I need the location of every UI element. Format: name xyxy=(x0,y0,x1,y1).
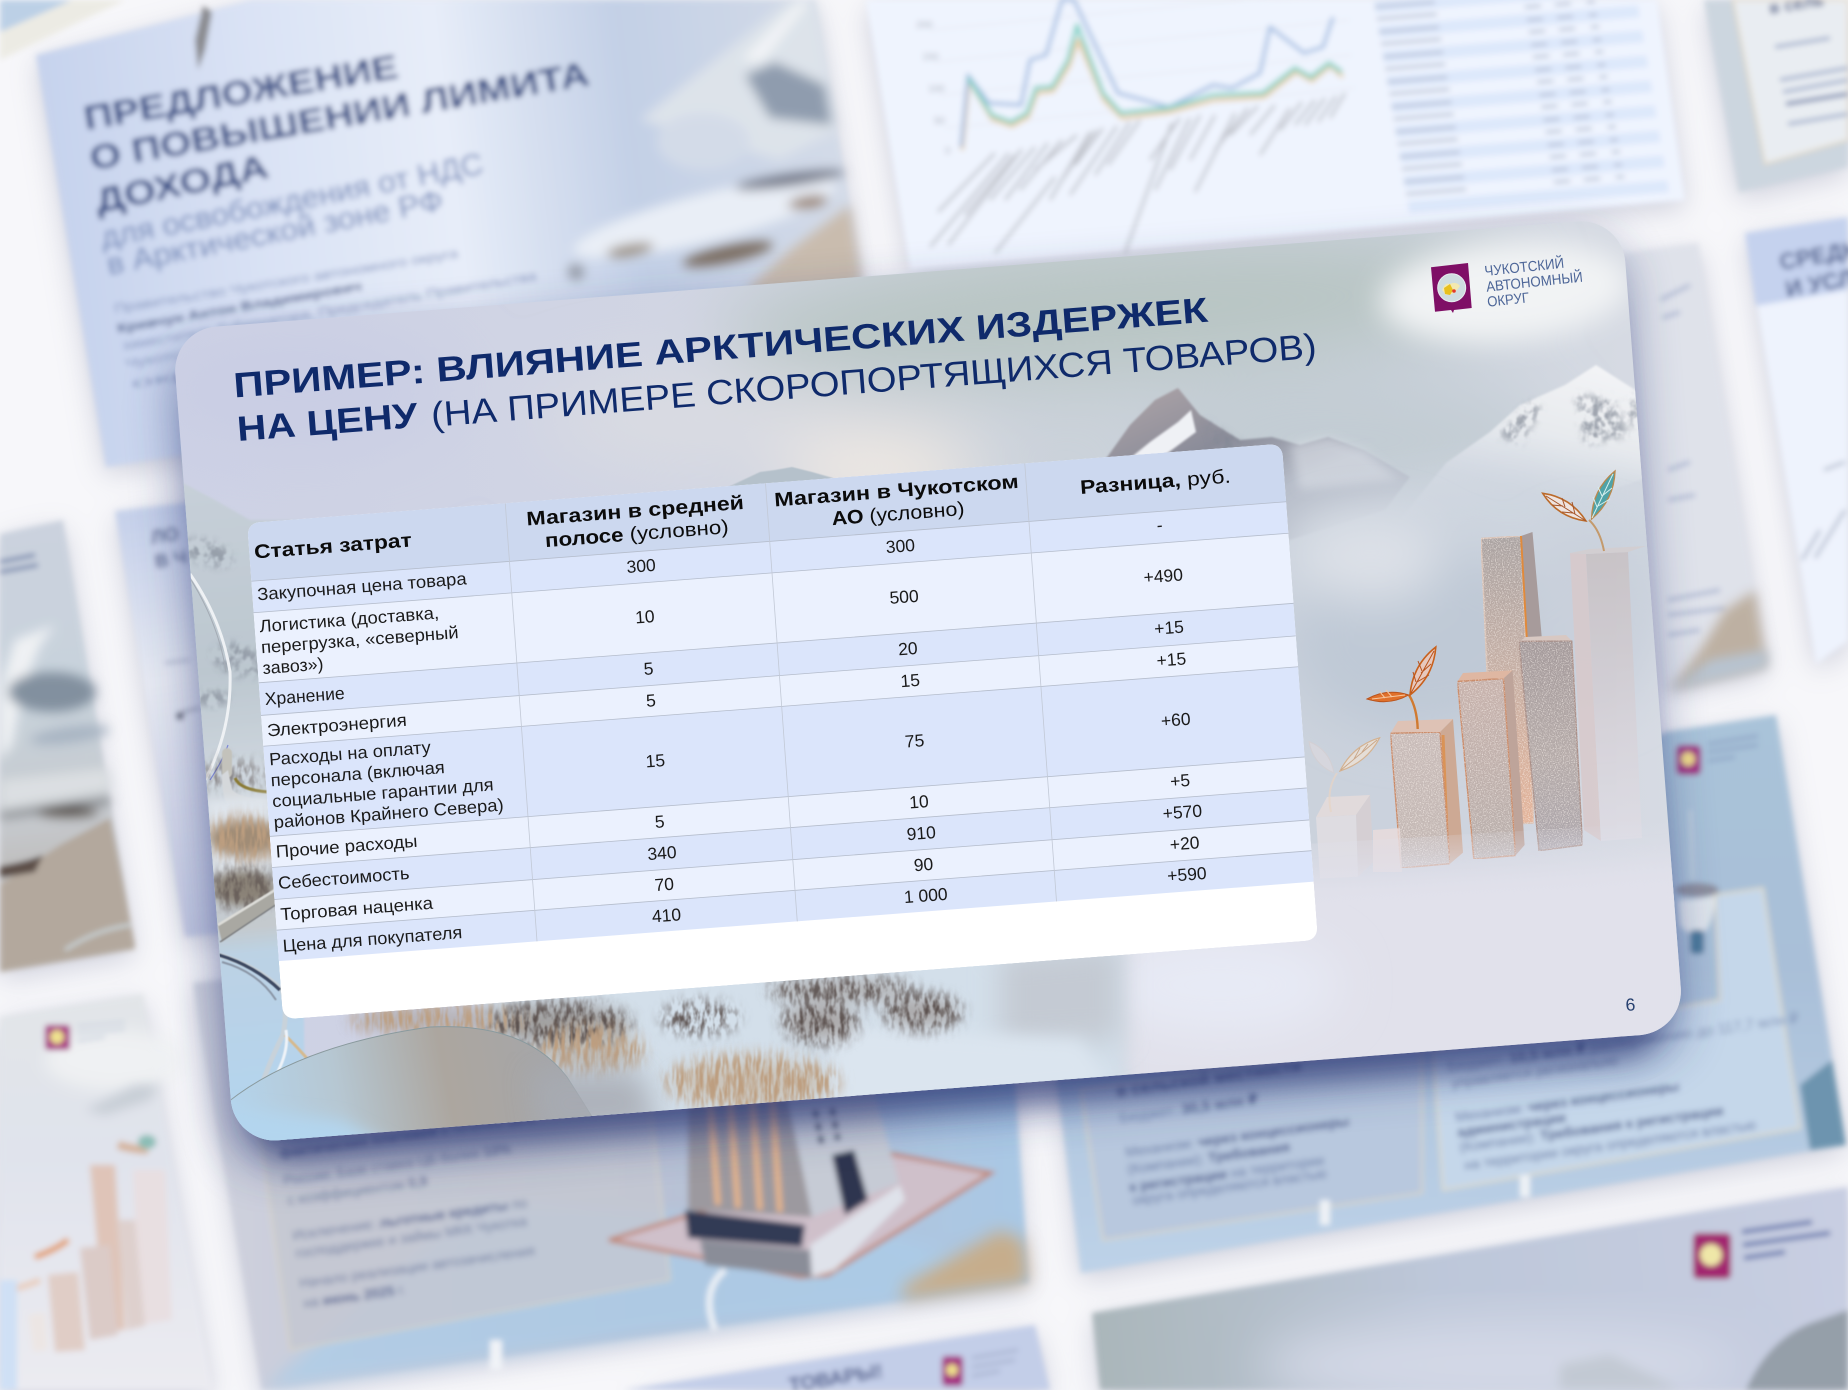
blurred card text: на июнь 2025 г. xyxy=(302,1281,407,1311)
leaves: orange sprout xyxy=(1367,647,1436,729)
table column: mid-latitude store values xyxy=(626,555,682,926)
table column: mid-latitude store values: 340 xyxy=(647,842,678,864)
building xyxy=(685,1085,905,1277)
table row labels: социальные гарантии для xyxy=(271,774,494,811)
table column: mid-latitude store values: 70 xyxy=(654,874,675,895)
blurred proposal authors: Правительство Чукотского автономного округа xyxy=(113,245,460,316)
table column: difference values: +60 xyxy=(1160,709,1191,731)
table row labels: районов Крайнего Севера) xyxy=(273,795,504,832)
table column: mid-latitude store values: 15 xyxy=(645,750,666,772)
light blue lower corner xyxy=(225,1108,400,1160)
blurred proposal title: О ПОВЫШЕНИИ ЛИМИТА xyxy=(87,55,592,178)
slide: behind main slide left xyxy=(115,490,300,937)
table column: Chukotka store values: 500 xyxy=(889,586,920,608)
table row labels: Электроэнергия xyxy=(266,710,407,740)
tan grass at right xyxy=(900,1230,1029,1300)
table column: Chukotka store values: 300 xyxy=(885,535,916,557)
slide: top right text card xyxy=(1704,0,1848,192)
table column: Chukotka store values xyxy=(878,534,949,907)
table header text: полосе (условно) xyxy=(544,516,729,552)
slide: corner fragment top left xyxy=(0,0,125,60)
blurred card text: на территории округа определяются властью xyxy=(1463,1116,1757,1173)
table header text: Разница, руб. xyxy=(1079,466,1232,499)
table column: difference values: +570 xyxy=(1162,801,1203,824)
title line two bold: НА ЦЕНУ xyxy=(236,396,420,449)
main slide tight shadow xyxy=(197,285,1665,1162)
table row labels: Закупочная цена товара xyxy=(256,568,468,604)
blurred card text: Исключение: льготные кредиты по xyxy=(291,1194,528,1243)
chart rotated x labels xyxy=(930,93,1345,253)
logo xyxy=(1431,254,1584,313)
far shore xyxy=(196,761,268,789)
table row labels xyxy=(256,567,513,956)
table row labels: завоз») xyxy=(262,654,324,678)
right area backdrop xyxy=(1290,520,1660,735)
blurred card text: России: Базе ставка ЦБ более 10% xyxy=(282,1140,513,1188)
slide: left with mountain xyxy=(0,520,135,972)
floor reflection xyxy=(1373,828,1402,872)
table column: Chukotka store values: 1 000 xyxy=(903,884,949,907)
chart axis labels: 100 xyxy=(928,84,945,95)
glass wedge xyxy=(218,890,280,942)
mountains and rocks xyxy=(568,0,862,320)
logo shield xyxy=(1431,263,1472,313)
blurred card text: Бюджет: 10,5 млн ₽ распоряжению до 117,7 млн ₽ xyxy=(1446,1010,1800,1076)
slide: behind main slide left: ЛО xyxy=(149,524,181,549)
table row labels: Торговая наценка xyxy=(280,893,434,924)
table column: mid-latitude store values: 5 xyxy=(645,690,656,711)
blurred card text: управляется регионально xyxy=(1450,1052,1619,1091)
sky blue lower area xyxy=(262,1200,1029,1390)
table header text: Магазин в средней xyxy=(526,492,745,531)
chart axis labels: 0 xyxy=(945,146,951,157)
blurred proposal authors: округа xyxy=(130,356,253,391)
logo text: ЧУКОТСКИЙ xyxy=(1484,254,1565,280)
cost table xyxy=(247,443,1318,1020)
slide background gradient xyxy=(150,200,1710,1160)
table column: Chukotka store values: 10 xyxy=(909,791,930,812)
blurred card text: Начало реализации автозачисления xyxy=(298,1242,536,1291)
back row of bushes xyxy=(767,978,917,1002)
slide: bottom left with bars xyxy=(0,994,213,1390)
centre bar xyxy=(1458,670,1525,859)
table column: mid-latitude store values: 5 xyxy=(654,811,665,832)
blurred card text: к регистрации на территории xyxy=(1128,1152,1325,1195)
bush shade bases xyxy=(350,980,958,1104)
blurred card text: Бюджет: 30,5 млн ₽ xyxy=(1118,1091,1259,1127)
logo text: ОКРУГ xyxy=(1486,290,1530,311)
mountain: right snowy peak xyxy=(1436,365,1642,478)
table column: Chukotka store values: 75 xyxy=(904,730,925,752)
table column: Chukotka store values: 90 xyxy=(913,854,934,875)
blurred proposal title: ПРЕДЛОЖЕНИЕ xyxy=(81,48,401,138)
tall tan reeds xyxy=(664,1054,840,1110)
blurred card text: фактических платежей в течение 10% xyxy=(278,1109,537,1161)
slide: behind main slide right xyxy=(1620,243,1767,690)
bush centre xyxy=(662,1002,738,1034)
tan bush foreground xyxy=(535,1026,645,1074)
table column: mid-latitude store values: 10 xyxy=(634,606,656,627)
table column: difference values: +20 xyxy=(1169,832,1200,855)
logo on bottom right slide xyxy=(1693,1222,1830,1279)
blurred card text: господдержке и займы МКК Чукотка xyxy=(294,1213,528,1261)
main slide wide shadow xyxy=(170,240,1682,1166)
small logo xyxy=(45,1022,125,1050)
blurred card text: с коэффициентом 0,9 xyxy=(286,1172,429,1208)
glass bubble rim xyxy=(219,955,310,1085)
mountain: far small peak xyxy=(730,466,833,486)
dark bush left xyxy=(488,1002,632,1046)
blurred card text: (Компании): Требования к регистрации xyxy=(1458,1102,1724,1155)
blurred proposal authors xyxy=(113,245,539,391)
chart axis labels xyxy=(916,20,951,157)
table column: difference values: +590 xyxy=(1167,863,1208,886)
white vase shapes xyxy=(709,1270,725,1330)
tall bar xyxy=(1481,532,1542,825)
table row labels: Логистика (доставка, xyxy=(259,603,440,636)
table column: difference values: +5 xyxy=(1169,770,1191,791)
slide: right card with heading xyxy=(1745,217,1848,664)
table column: difference values: +15 xyxy=(1156,648,1187,671)
pale far right bar xyxy=(1570,546,1646,841)
slide: bottom right with mountains xyxy=(1092,1187,1848,1390)
blurred proposal title xyxy=(81,48,592,221)
small logo on steel slide xyxy=(1676,736,1758,775)
snowy foreground xyxy=(480,940,1125,1160)
small bars xyxy=(10,1135,172,1352)
table base xyxy=(247,443,1318,1020)
slide title xyxy=(232,291,1318,449)
blurred proposal title: ДОХОДА xyxy=(92,148,272,221)
blurred card text: в сельской местности xyxy=(1115,1056,1303,1101)
blurred card text: округа определяются властью xyxy=(1131,1165,1328,1208)
table rows fill xyxy=(251,502,1314,961)
blurred proposal authors: Кривчун Антон Владимирович xyxy=(116,278,363,336)
mountain forms xyxy=(0,625,113,817)
left mountain streaks xyxy=(180,534,268,706)
bush centre right xyxy=(782,1000,858,1044)
text card right xyxy=(1433,888,1800,1190)
white glow behind logo xyxy=(1376,231,1634,353)
title line one: ПРИМЕР: ВЛИЯНИЕ АРКТИЧЕСКИХ ИЗДЕРЖЕК xyxy=(232,291,1210,405)
table column: Chukotka store values: 910 xyxy=(906,822,937,844)
leaves: teal sprout xyxy=(1543,471,1615,551)
table row labels: Хранение xyxy=(264,683,345,709)
table header fill xyxy=(247,443,1286,581)
fog over bar bases xyxy=(1290,820,1700,925)
glass dome xyxy=(228,1027,600,1165)
chart axis labels: 150 xyxy=(922,52,939,63)
table grid lines xyxy=(247,443,1314,961)
blurred proposal authors: заместитель Губернатора, Председатель Правительства xyxy=(121,268,539,353)
slide number: 6 xyxy=(1625,994,1636,1015)
blurred card text: Механизм: через концессионеры xyxy=(1124,1113,1350,1160)
bushes xyxy=(350,978,962,1110)
right centre bar xyxy=(1519,635,1582,851)
table row labels: персонала (включая xyxy=(270,757,445,790)
text card left xyxy=(1081,1040,1422,1240)
chart axis labels: 200 xyxy=(916,20,933,31)
slide: proposal title xyxy=(36,0,862,467)
logo text: АВТОНОМНЫЙ xyxy=(1485,268,1584,296)
rock bottom right xyxy=(1800,1060,1846,1150)
dome bottom fade xyxy=(530,1070,660,1140)
table column: mid-latitude store values: 410 xyxy=(651,904,682,926)
table header text: АО (условно) xyxy=(831,498,965,530)
left icy landscape strip xyxy=(160,478,310,1150)
atmospheric colour glows xyxy=(728,232,1501,478)
blurred card text: Механизм: через концессионеры xyxy=(1454,1078,1680,1125)
table column: difference values: - xyxy=(1156,515,1163,535)
slide: building on tray xyxy=(193,900,1029,1390)
blurred card text xyxy=(278,1109,537,1311)
text card xyxy=(255,1100,670,1350)
table column: Chukotka store values: 15 xyxy=(900,670,921,691)
chart axis labels: 50 xyxy=(934,116,946,127)
slide: line chart and data table xyxy=(866,0,1685,270)
blurred proposal subtitle: для освобождения от НДС xyxy=(98,148,486,255)
table header text xyxy=(252,455,1232,574)
chart grid lines xyxy=(930,0,1355,128)
table row labels: Цена для покупателя xyxy=(282,922,463,956)
table row labels: Прочие расходы xyxy=(275,831,418,862)
metal clasp xyxy=(222,748,270,810)
bar chart illustration xyxy=(1309,471,1646,878)
bush right xyxy=(882,994,962,1030)
lower pale area xyxy=(1120,865,1700,1110)
chart series xyxy=(961,0,1343,150)
blurred card text: (Компании): Требования xyxy=(1126,1138,1291,1177)
left bar xyxy=(1390,719,1463,868)
table header text: Магазин в Чукотском xyxy=(773,471,1019,512)
table row labels: Расходы на оплату xyxy=(268,737,432,769)
table column: mid-latitude store values: 300 xyxy=(626,555,657,577)
leaves: pale sprout xyxy=(1309,738,1380,812)
blurred proposal subtitle: в Арктической зоне РФ xyxy=(104,184,446,282)
blurred card text xyxy=(1115,1010,1800,1208)
chart side table rows xyxy=(1374,0,1679,213)
fog over mountains xyxy=(1288,481,1404,538)
mountain: central peak xyxy=(1098,388,1410,540)
slide: bottom with logo xyxy=(623,1325,1050,1390)
table header text: Статья затрат xyxy=(253,529,412,563)
table column: Chukotka store values: 20 xyxy=(897,638,919,659)
table row labels: перегрузка, «северный xyxy=(260,622,459,657)
snow patch xyxy=(205,795,270,880)
slide: behind main slide left: В Ч xyxy=(153,547,189,573)
main slide xyxy=(150,200,1710,1165)
title line two regular: (НА ПРИМЕРЕ СКОРОПОРТЯЩИХСЯ ТОВАРОВ) xyxy=(430,327,1318,435)
blurred card text: администрации xyxy=(1456,1109,1567,1140)
bonsai in bowl xyxy=(1675,810,1719,954)
brown shrubs on snow xyxy=(207,816,283,910)
logo text xyxy=(1484,254,1584,311)
dark bush near table xyxy=(350,1006,530,1034)
tray xyxy=(609,1153,991,1277)
table column: difference values: +490 xyxy=(1143,564,1184,587)
pale cube xyxy=(1316,795,1372,864)
table column: difference values: +15 xyxy=(1153,617,1185,639)
table column: mid-latitude store values: 5 xyxy=(643,658,654,679)
table column: difference values xyxy=(1139,513,1208,886)
table row labels: Себестоимость xyxy=(277,863,410,893)
dark spike at top xyxy=(195,6,212,70)
slide: steel blue with two text cards xyxy=(1054,715,1846,1273)
blurred proposal authors: Чукотского автономного xyxy=(124,323,324,371)
glass ring curve xyxy=(190,574,230,780)
